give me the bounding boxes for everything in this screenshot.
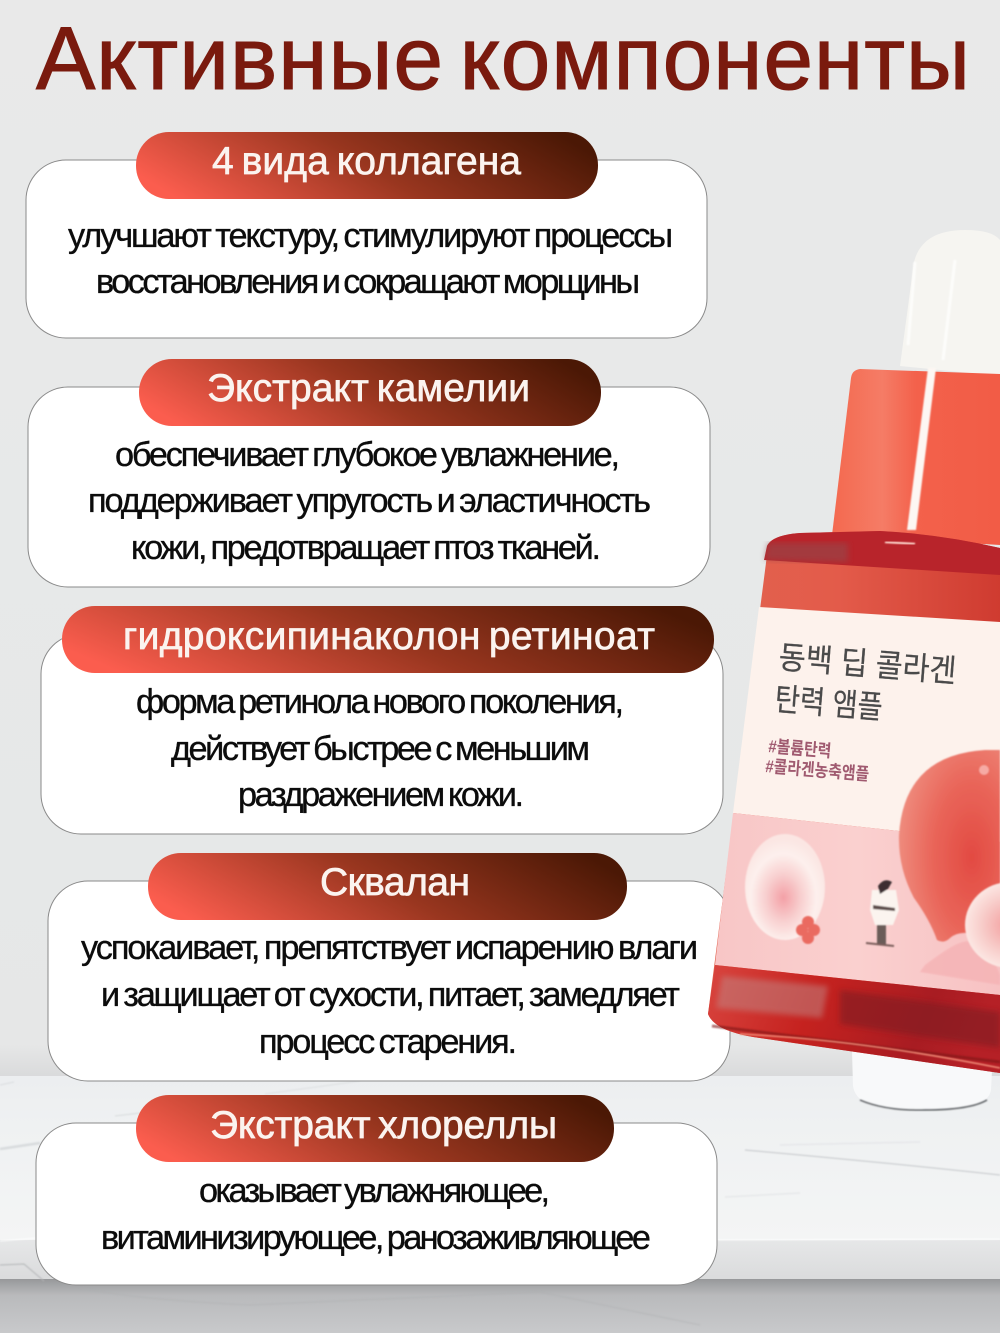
description: сквалан: процесс старения. [259, 1023, 517, 1061]
label art: ground [920, 941, 1000, 985]
description: экстракт камелии: обеспечивает глубокое увлажнение, [115, 436, 620, 474]
heading pill: гидроксипинаколон ретиноат [62, 606, 714, 673]
product: serum bottle [708, 230, 1000, 1110]
heading pill: экстракт хлореллы [136, 1095, 614, 1162]
bottle body [708, 531, 1000, 1073]
bottle base liquid [708, 965, 1000, 1073]
label art: figure [866, 880, 899, 946]
description: 4 вида коллагена [68, 217, 673, 301]
description: экстракт камелии [88, 436, 651, 567]
heading pill: сквалан [148, 853, 627, 920]
heading: сквалан: Сквалан [320, 861, 470, 904]
description: сквалан [81, 929, 698, 1061]
label text: product name: 탄력 앰플 [773, 681, 884, 726]
description: экстракт камелии: поддерживает упругость и эластичность [88, 482, 651, 520]
heading: 4 вида коллагена: 4 вида коллагена [212, 140, 521, 183]
description: сквалан: и защищает от сухости, питает, замедляет [101, 976, 680, 1014]
description: гидроксипинаколон ретиноат [136, 683, 624, 814]
label art: small ball [965, 882, 1000, 968]
label text: product name [773, 639, 958, 726]
label text: product name: 동백 딥 콜라겐 [777, 639, 958, 689]
label art: flower [796, 916, 820, 944]
heading pill: экстракт камелии [139, 359, 601, 426]
description: экстракт камелии: кожи, предотвращает птоз тканей. [131, 529, 601, 567]
description: экстракт хлореллы: оказывает увлажняющее, [199, 1172, 550, 1210]
heading: экстракт хлореллы: Экстракт хлореллы [210, 1104, 557, 1147]
label text: hashtags: #콜라겐농축앰플 [765, 756, 870, 784]
description: гидроксипинаколон ретиноат: действует быстрее с меньшим [171, 730, 590, 768]
description: гидроксипинаколон ретиноат: раздражением кожи. [238, 776, 524, 814]
description: экстракт хлореллы: витаминизирующее, ранозаживляющее [101, 1219, 651, 1257]
dropper collar [832, 369, 1000, 545]
heading pill: 4 вида коллагена [136, 132, 598, 199]
label [733, 607, 1000, 842]
label text: hashtags [765, 736, 870, 784]
panel: экстракт хлореллы [36, 1095, 717, 1285]
dropper bulb [900, 230, 1000, 376]
neck band [764, 531, 1000, 575]
description: 4 вида коллагена: улучшают текстуру, стимулируют процессы [68, 217, 673, 255]
bottle foot [852, 1050, 993, 1110]
heading: экстракт камелии: Экстракт камелии [207, 367, 530, 410]
label text: hashtags: #볼륨탄력 [768, 736, 832, 761]
label art: balloon [899, 750, 1000, 945]
panel: гидроксипинаколон ретиноат [41, 606, 723, 834]
panel: экстракт камелии [28, 359, 710, 587]
heading: гидроксипинаколон ретиноат: гидроксипинаколон ретиноат [123, 615, 655, 658]
label art: egg [745, 834, 825, 940]
panel: 4 вида коллагена [26, 132, 707, 338]
description: экстракт хлореллы [101, 1172, 651, 1257]
description: 4 вида коллагена: восстановления и сокращают морщины [96, 263, 640, 301]
description: гидроксипинаколон ретиноат: форма ретинола нового поколения, [136, 683, 624, 721]
description: сквалан: успокаивает, препятствует испарению влаги [81, 929, 698, 967]
panel: сквалан [48, 853, 730, 1081]
title: Активные компоненты [36, 8, 970, 108]
